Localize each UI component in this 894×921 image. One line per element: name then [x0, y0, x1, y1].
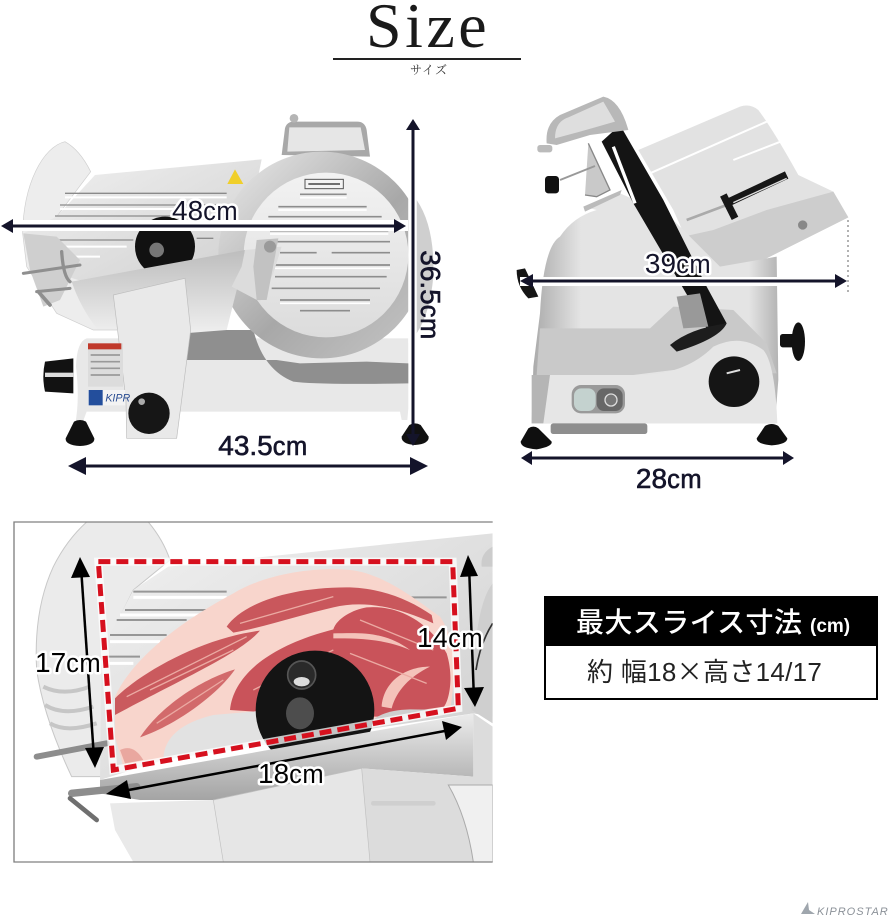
meat — [115, 569, 454, 767]
rod and bracket — [23, 252, 80, 305]
carriage wing — [100, 713, 473, 800]
panel border — [14, 522, 493, 862]
illustration: slicer side view — [517, 97, 848, 449]
top handle — [546, 97, 628, 145]
lower fat cutout — [164, 711, 263, 757]
feet — [66, 420, 94, 446]
table: maximum slice size: 約 幅18×高さ14/17 — [587, 652, 822, 689]
support post — [113, 278, 191, 438]
rod and bracket — [37, 743, 433, 820]
knob: center hub — [135, 217, 195, 277]
dimension: 43.5cm depth: 43.5cm — [218, 430, 308, 461]
power switch — [572, 385, 625, 413]
dimension: 14cm — [417, 555, 484, 707]
logo: KIPROSTAR: KIPROSTAR — [817, 906, 889, 918]
illustration: slicer front view — [23, 114, 433, 446]
dimension: 18cm: 18cm — [258, 758, 324, 789]
dimension: 14cm: 14cm — [417, 622, 483, 653]
support post — [213, 768, 370, 862]
red dashed slice area — [98, 562, 458, 770]
label plate — [88, 343, 123, 387]
body — [532, 193, 778, 423]
blade disc — [244, 170, 417, 343]
icon: warning triangle — [227, 169, 243, 184]
dimension: 39cm — [520, 220, 848, 292]
table: maximum slice size: (cm) — [810, 616, 850, 637]
table: maximum slice size — [544, 596, 878, 699]
dimension: 36.5cm height: 36.5 cm — [415, 250, 446, 340]
base — [75, 338, 408, 425]
knob — [256, 650, 374, 750]
dimension: 36.5cm height — [406, 119, 446, 446]
title: Size — [333, 0, 521, 77]
black arm — [602, 125, 727, 328]
dimension: 48cm width: 48cm — [172, 195, 238, 226]
right blade edge — [481, 547, 493, 567]
dimension: 28cm — [521, 451, 794, 494]
dimension: 17cm — [35, 557, 104, 768]
knob: small adjuster — [560, 166, 595, 180]
dimension: 18cm — [106, 721, 462, 799]
dimension: 17cm: 17cm — [35, 647, 101, 678]
knob: thickness dial — [709, 356, 759, 407]
upper handle — [282, 122, 370, 157]
table: maximum slice size: 最大スライス寸法 — [576, 607, 802, 638]
dimension: 28cm: 28cm — [636, 463, 702, 494]
angled plate — [638, 106, 848, 277]
knob: thickness dial: KIPR — [105, 393, 131, 405]
panel: maximum slice area photo — [14, 522, 493, 862]
title: Size: サイズ — [410, 63, 448, 77]
dimension: 39cm: 39cm — [645, 248, 711, 279]
tray — [100, 533, 493, 780]
knob: rear handle — [780, 322, 805, 361]
logo: KIPROSTAR — [801, 902, 889, 918]
dimension: 43.5cm depth — [68, 430, 428, 475]
guard plate — [36, 522, 170, 777]
carriage tray — [72, 250, 245, 333]
dimension: 48cm width — [0, 195, 408, 233]
blade ring — [218, 152, 425, 358]
rod and grip — [687, 205, 727, 220]
feet — [521, 427, 552, 449]
